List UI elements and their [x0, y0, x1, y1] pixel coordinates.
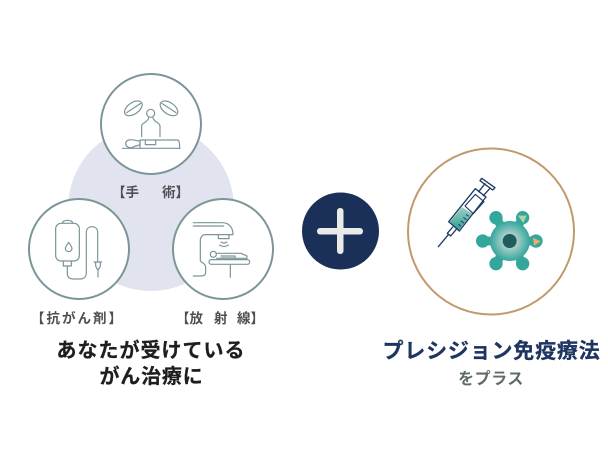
panel: precision immunotherapy [408, 148, 574, 314]
panel: surgery [101, 74, 201, 200]
label: surgery second part: 術】 [162, 185, 189, 200]
heading: current cancer treatment [56, 338, 246, 388]
chemo circle [29, 199, 129, 299]
icon: IV drip [56, 220, 102, 279]
label: radiation: 【放 [176, 311, 203, 326]
icon: immune cell [476, 211, 543, 270]
outer circle [408, 148, 574, 314]
label: radiation second character: 射 [214, 310, 228, 326]
surgery circle [101, 74, 201, 174]
icon: plus [302, 192, 379, 270]
background circle [68, 125, 234, 291]
icon: syringe [438, 178, 495, 247]
label: chemotherapy: 【抗がん剤】 [31, 310, 124, 326]
panel: radiation [173, 199, 273, 326]
label: radiation third character: 線】 [237, 311, 264, 326]
heading line 1: あなたが受けている [56, 338, 246, 362]
icon: surgery [122, 98, 180, 148]
heading: precision immunotherapy: プレシジョン免疫療法 [382, 340, 600, 363]
label: surgery: 【手 [112, 184, 139, 200]
radiation circle [173, 199, 273, 299]
heading line 2: がん治療に [100, 364, 204, 388]
icon: radiation machine [193, 223, 250, 277]
panel: chemotherapy [29, 199, 129, 326]
subheading: add on: をプラス [458, 370, 524, 388]
